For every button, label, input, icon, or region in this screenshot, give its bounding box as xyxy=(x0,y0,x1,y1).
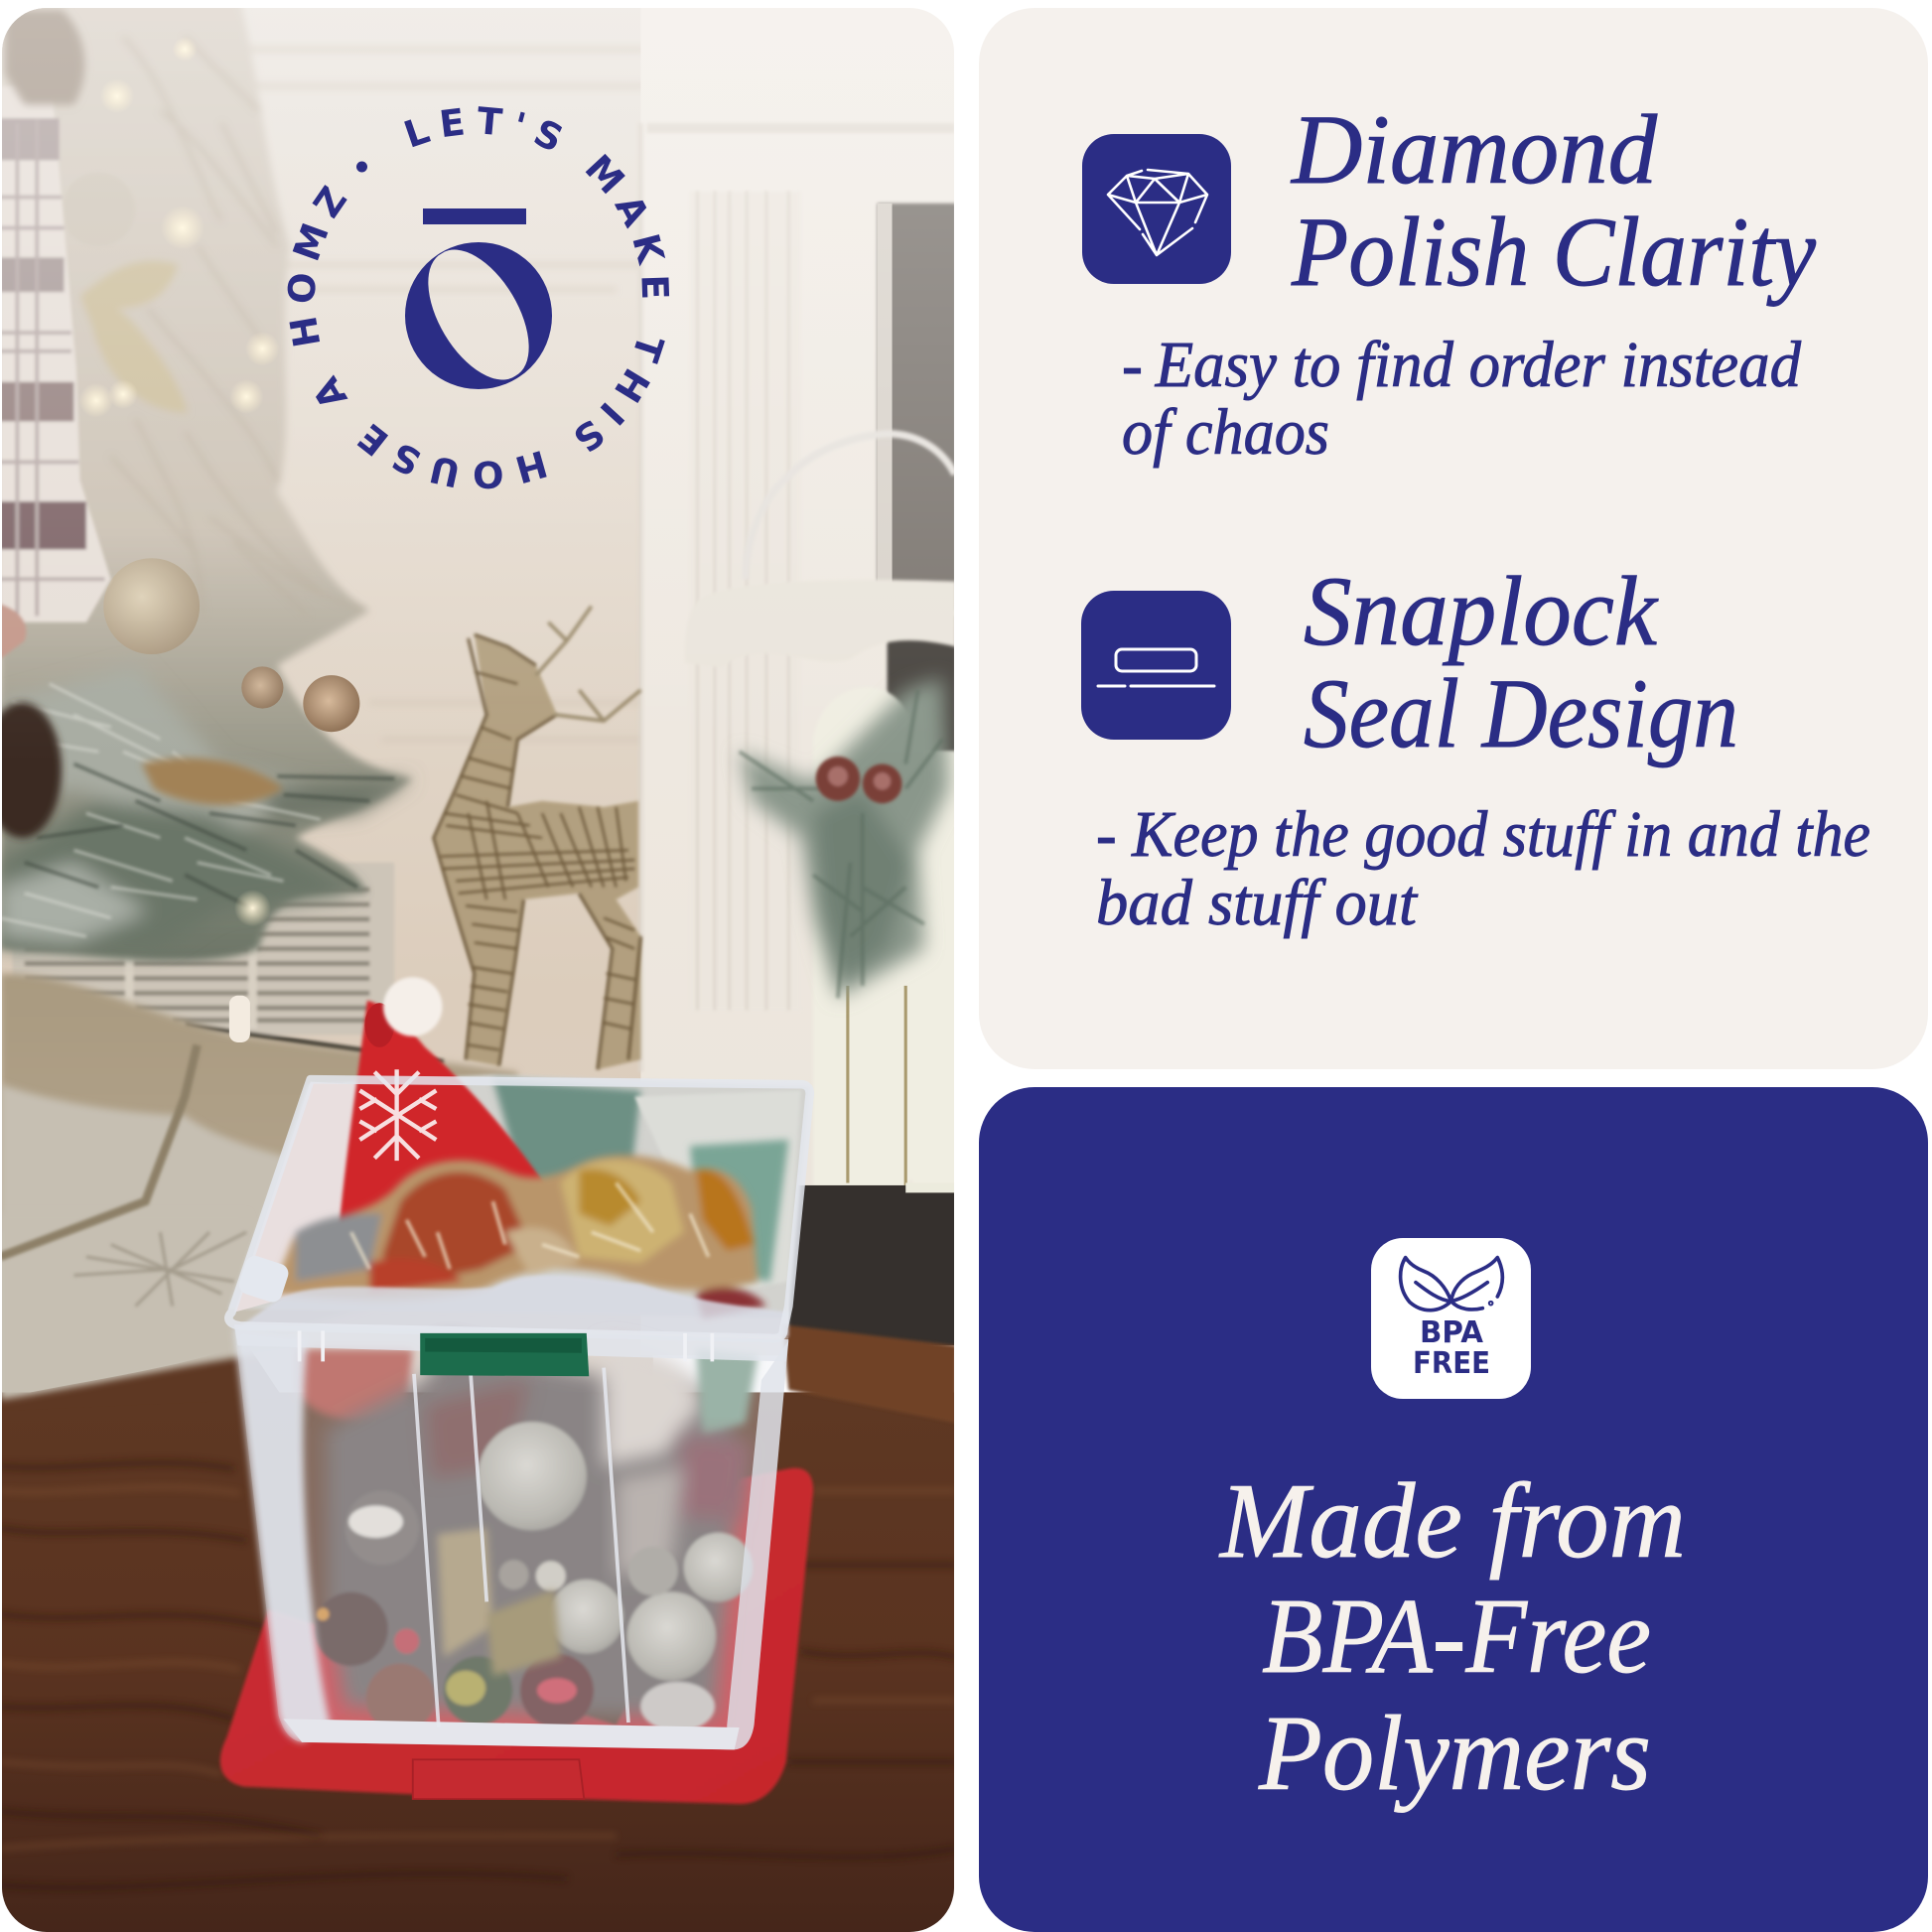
pine cones xyxy=(816,757,901,803)
heading: diamond polish clarity: Polish Clarity xyxy=(1291,197,1817,307)
floor grain xyxy=(0,1462,956,1887)
gold glitter ball xyxy=(103,558,200,654)
bin interior back xyxy=(228,1074,809,1318)
column fluting xyxy=(640,123,955,1072)
heading: made from BPA-free polymers xyxy=(1218,1462,1686,1813)
logo bar xyxy=(423,208,526,224)
snow branches xyxy=(0,665,413,949)
christmas tree xyxy=(0,0,413,961)
circular slogan: LET'S MAKE THIS HOUSE A HOMZ xyxy=(288,106,669,488)
floor xyxy=(0,1392,961,1932)
icon: BPA free: FREE xyxy=(1413,1346,1490,1381)
top fade xyxy=(0,0,961,763)
bin left wall xyxy=(234,1082,357,1312)
rim clip xyxy=(236,1253,291,1305)
logo O xyxy=(405,242,552,389)
tree skirt tan xyxy=(0,973,517,1232)
panel: product photo xyxy=(0,0,961,1932)
dark window behind chair xyxy=(888,617,956,752)
heading: diamond polish clarity xyxy=(1290,94,1817,307)
scroll ornament xyxy=(62,173,136,246)
ornament glints xyxy=(351,1182,709,1269)
bin front wall film xyxy=(234,1324,788,1749)
text: keep the good stuff xyxy=(1096,798,1870,939)
text: easy to find: - Easy to find order instead xyxy=(1122,329,1802,401)
wrapped ornaments xyxy=(271,1155,766,1318)
plaid dark bands xyxy=(0,118,86,550)
chair slat gaps xyxy=(848,986,905,1189)
gold leaves xyxy=(80,261,188,413)
rim tabs xyxy=(300,1330,712,1361)
heading: snaplock seal design: Seal Design xyxy=(1304,658,1738,768)
panel: BPA free xyxy=(979,1087,1928,1932)
chair back xyxy=(685,580,956,668)
heading: made from BPA-free polymers: BPA-Free xyxy=(1262,1578,1651,1696)
plaid lines xyxy=(0,118,104,617)
text: easy to find xyxy=(1122,329,1802,469)
wall moulding xyxy=(256,48,640,290)
tree skirt pale xyxy=(2,1083,281,1231)
ornament on vent xyxy=(229,996,250,1042)
skirt edge repair xyxy=(2,1346,245,1404)
bin ribs xyxy=(414,1368,628,1727)
logo badge xyxy=(288,106,669,488)
heading: made from BPA-free polymers: Polymers xyxy=(1258,1695,1651,1813)
needle strokes xyxy=(0,684,321,936)
wall xyxy=(0,0,653,1417)
green latch xyxy=(420,1333,589,1376)
heading: snaplock seal design xyxy=(1304,556,1738,768)
panel: features xyxy=(979,8,1928,1069)
santa hat xyxy=(339,977,548,1245)
icon: snaplock xyxy=(1081,591,1231,740)
tree top texture xyxy=(111,37,363,617)
heading: made from BPA-free polymers: Made from xyxy=(1218,1462,1686,1581)
greenery needles xyxy=(740,690,942,998)
bin contents behind front wall xyxy=(296,1343,758,1732)
snowflake xyxy=(359,1069,436,1161)
hat pompom xyxy=(383,977,443,1036)
plaid shirt xyxy=(0,10,111,659)
chair arch xyxy=(746,434,955,579)
window xyxy=(878,204,956,610)
text: easy to find: of chaos xyxy=(1122,396,1329,469)
wood sill xyxy=(782,1324,956,1423)
heading: diamond polish clarity: Diamond xyxy=(1290,94,1658,205)
text: keep the good stuff: bad stuff out xyxy=(1096,867,1419,939)
greenery swag xyxy=(740,678,949,998)
plastic bin xyxy=(228,977,810,1749)
heading: snaplock seal design: Snaplock xyxy=(1304,556,1659,666)
hand xyxy=(0,604,26,659)
bin film curve xyxy=(234,1275,788,1337)
reindeer wire xyxy=(434,607,640,1069)
dot xyxy=(356,161,367,173)
icon: BPA free xyxy=(1371,1238,1531,1399)
tree silhouette xyxy=(0,0,413,961)
bin right glare xyxy=(369,1340,788,1749)
skirt seam xyxy=(0,1044,198,1257)
icon: diamond xyxy=(1082,134,1231,284)
reindeer body xyxy=(434,634,640,1069)
bin left glare xyxy=(234,1328,331,1742)
skirt embroidery xyxy=(73,1232,246,1307)
silver ornaments xyxy=(479,1422,587,1530)
bin bottom band xyxy=(283,1719,740,1749)
chair slats xyxy=(813,688,956,1189)
icon: BPA free: BPA xyxy=(1420,1315,1484,1350)
tree lights xyxy=(78,37,280,926)
bronze swirl xyxy=(142,758,283,805)
dark interior xyxy=(0,702,62,838)
red lid xyxy=(220,1468,813,1804)
bin rim xyxy=(228,1079,810,1338)
white column xyxy=(640,0,961,1355)
hair xyxy=(5,10,84,104)
dark fireplace xyxy=(788,1185,961,1345)
reindeer xyxy=(434,607,640,1069)
vent xyxy=(12,863,444,1062)
text: keep the good stuff: - Keep the good stuff in and the xyxy=(1096,798,1870,871)
bronze ball xyxy=(303,675,359,732)
